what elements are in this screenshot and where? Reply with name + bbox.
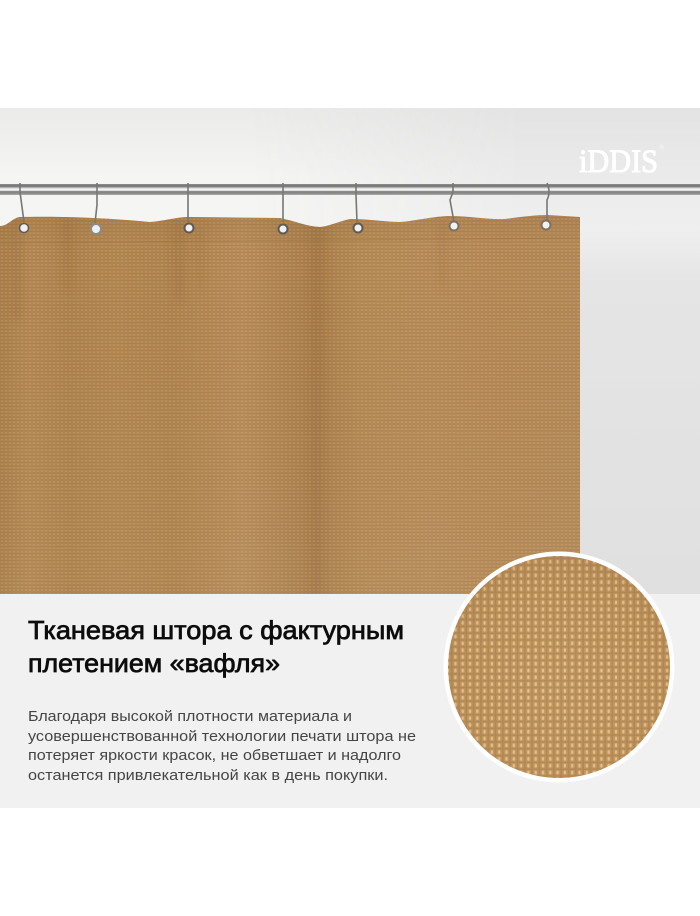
shower curtain hooks and grommets xyxy=(20,183,550,234)
hook 5 xyxy=(354,183,362,232)
logo: iDDIS: iDDIS xyxy=(579,144,658,180)
hook 1 xyxy=(20,183,28,232)
body text: Благодаря высокой плотности материала и xyxy=(28,709,352,725)
magnified fabric circle xyxy=(440,550,680,790)
heading: Тканевая штора с фактурным xyxy=(28,615,404,645)
heading xyxy=(28,615,404,678)
heading: плетением «вафля» xyxy=(28,648,280,678)
infographic canvas xyxy=(0,108,700,808)
curtain fabric xyxy=(0,210,580,594)
bottom text panel xyxy=(0,594,700,808)
hook 3 xyxy=(184,183,194,232)
body text: потеряет яркости красок, не обветшает и надолго xyxy=(28,748,401,764)
curtain rod xyxy=(0,184,700,195)
body text: усовершенствованной технологии печати штора не xyxy=(28,729,416,745)
hook 6 xyxy=(450,183,458,230)
hook 4 xyxy=(278,183,288,234)
body text xyxy=(28,709,416,784)
hook 7 xyxy=(542,183,550,230)
hook 2 xyxy=(91,183,101,234)
photo: wall behind the curtain xyxy=(0,108,700,594)
logo: iDDIS: ® xyxy=(659,144,665,152)
body text: останется привлекательной как в день покупки. xyxy=(28,768,388,784)
